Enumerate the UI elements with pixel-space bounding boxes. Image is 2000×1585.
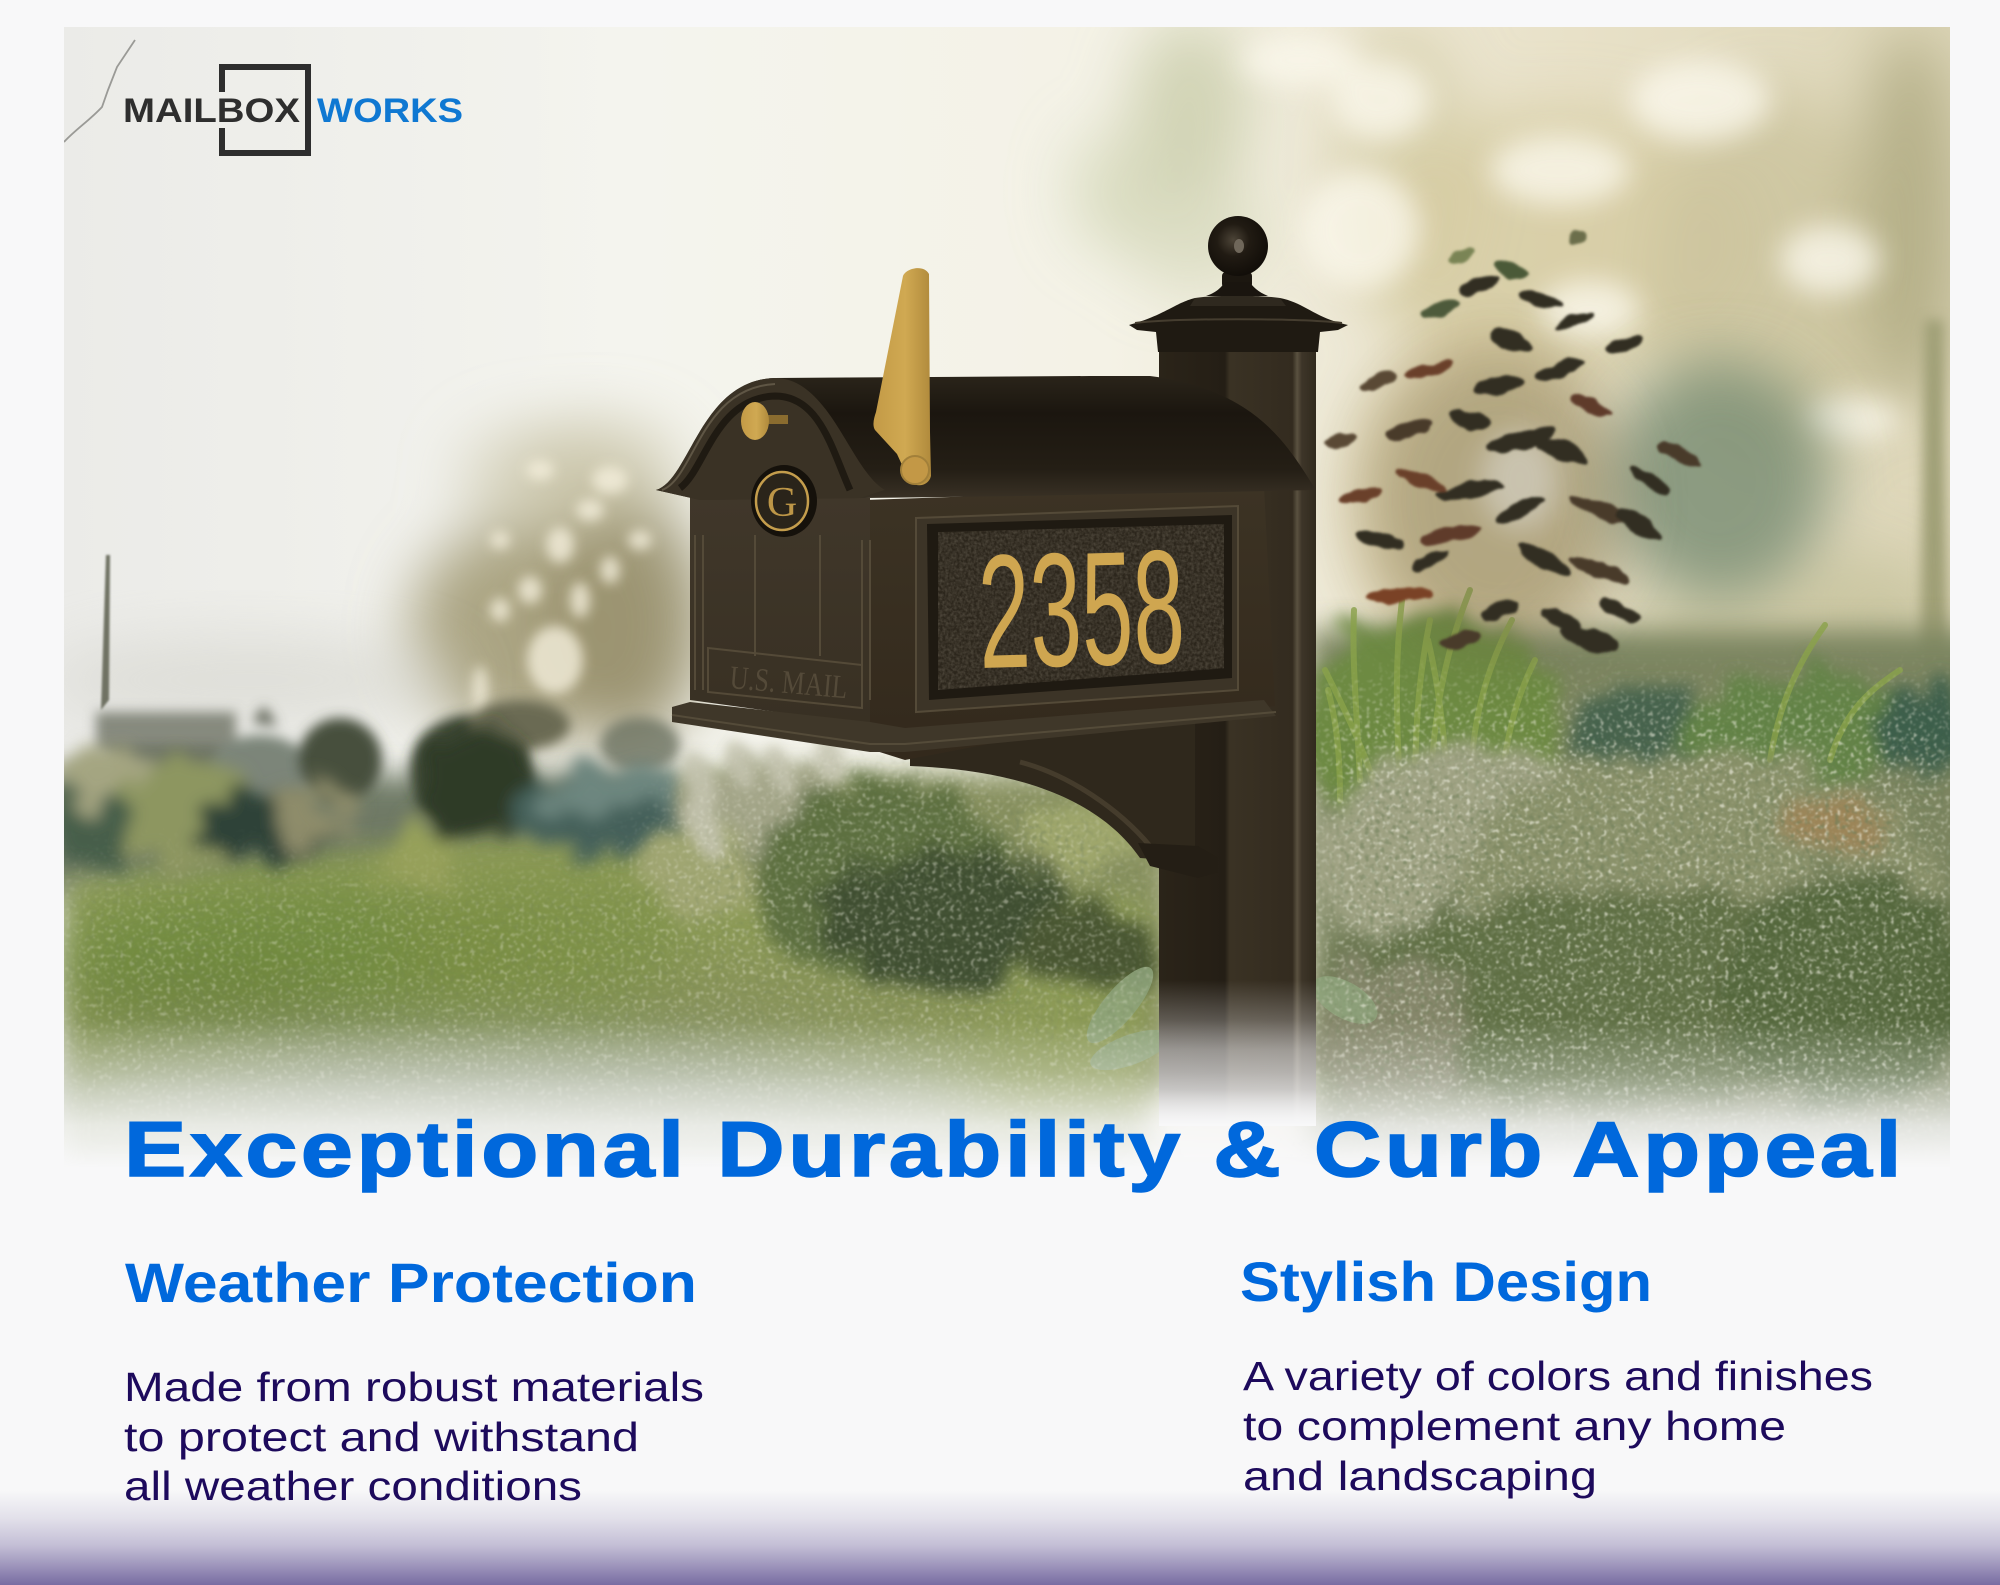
heading: weather protection: Weather Protection	[125, 1251, 697, 1314]
title: Exceptional Durability & Curb Appeal	[124, 1105, 1905, 1193]
misty sky	[64, 27, 1950, 1020]
photo panel: garden background	[0, 20, 2000, 1170]
grass blades	[1325, 590, 1900, 820]
mailbox on post	[656, 216, 1348, 1125]
leafy tree shadow	[1370, 350, 1630, 650]
pale plumes	[676, 733, 850, 868]
medallion	[751, 465, 817, 537]
text block: stylish design	[1243, 1353, 1873, 1499]
plate frame	[916, 506, 1238, 712]
post	[1159, 350, 1316, 1125]
misty trees upper right	[1052, 27, 1950, 636]
mailbox front face	[690, 495, 870, 725]
medallion: G	[767, 480, 797, 526]
text block: stylish design: A variety of colors and finishes	[1243, 1353, 1873, 1399]
hazy green tree right	[1582, 328, 1918, 625]
dark leafy tree right	[1321, 231, 1704, 657]
door knob	[741, 402, 788, 440]
text block: weather protection: to protect and withstand	[124, 1414, 639, 1460]
distant trunk right	[1920, 320, 1948, 680]
panel: stylish design	[1240, 1250, 1873, 1499]
center bush behind mailbox	[640, 760, 1160, 990]
bottom fade of photo	[64, 1020, 1950, 1170]
U.S. MAIL embossing: U.S. MAIL	[728, 660, 849, 706]
foliage dark specks	[64, 27, 1950, 1167]
tan tree left of mailbox	[410, 420, 705, 745]
text block: stylish design: and landscaping	[1243, 1453, 1597, 1499]
hosta leaves near post	[1077, 958, 1385, 1078]
roof	[656, 376, 1316, 500]
brace collar	[1138, 843, 1218, 878]
logo word works: WORKS	[317, 92, 463, 130]
text block: weather protection	[124, 1364, 704, 1509]
brace	[910, 700, 1195, 862]
foliage light specks	[64, 27, 1950, 1167]
mailbox side body	[865, 486, 1275, 760]
logo	[123, 67, 463, 153]
text block: stylish design: to complement any home	[1243, 1403, 1786, 1449]
text block: weather protection: all weather conditions	[124, 1463, 582, 1509]
logo word mailbox: MAILBOX	[123, 92, 300, 130]
right grasses	[1305, 610, 1965, 850]
lawn	[64, 834, 1150, 1170]
textured number plate	[938, 524, 1224, 690]
midground colour bed	[0, 630, 2000, 1160]
roof front arch	[656, 378, 885, 500]
crack mark top left	[64, 40, 135, 142]
low haze over horizon	[40, 635, 460, 725]
heading: stylish design: Stylish Design	[1240, 1250, 1652, 1313]
front face panels	[695, 535, 870, 708]
post fade	[1159, 980, 1316, 1126]
logo frame	[222, 67, 308, 153]
bokeh highlights on tan tree	[472, 460, 652, 714]
distant sheds and shrubs	[96, 700, 680, 825]
left mid shrubs	[40, 730, 690, 884]
post cap	[1129, 296, 1348, 352]
plate stipple texture	[938, 524, 1224, 690]
gold flag	[873, 268, 931, 485]
panel: weather protection	[124, 1251, 704, 1509]
finial ball	[1206, 216, 1268, 296]
base molding	[672, 700, 1276, 752]
house number: 2358	[976, 516, 1187, 703]
footer gradient band	[0, 1490, 2000, 1585]
text block: weather protection: Made from robust materials	[124, 1364, 704, 1410]
foreground bush right	[1310, 750, 1980, 1110]
distant pole	[101, 555, 110, 710]
